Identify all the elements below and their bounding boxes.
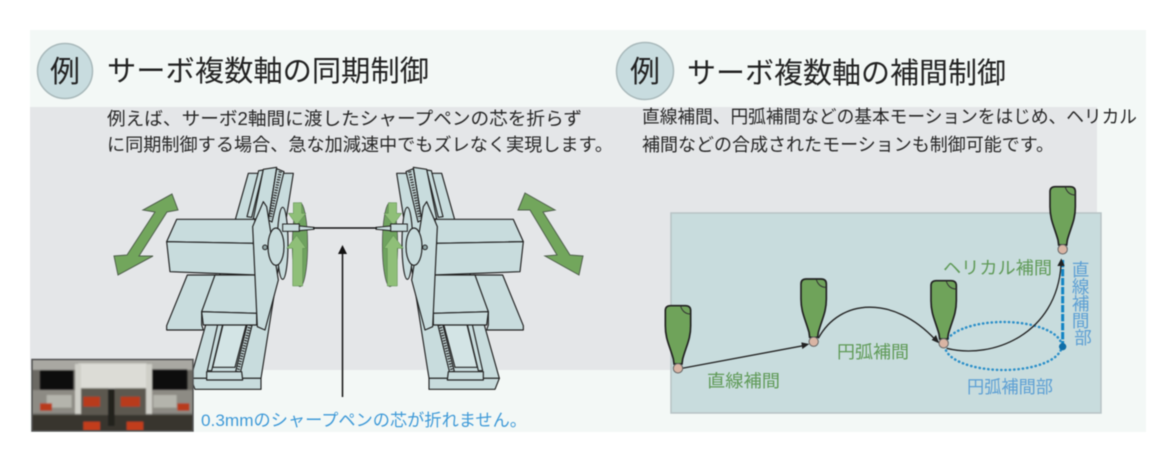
heading: left: サーボ複数軸の同期制御 <box>107 55 429 88</box>
label: linear interpolation section: 間 <box>1072 311 1089 331</box>
pencil lead wire <box>313 227 377 229</box>
heading: right: サーボ複数軸の補間制御 <box>687 57 1006 90</box>
label: arc interpolation section: 円弧補間部 <box>967 377 1053 397</box>
arrow: pointer to lead <box>338 245 347 397</box>
arrow: linear move <box>678 342 809 369</box>
panel: interpolation diagram <box>671 213 1101 413</box>
photo: machine <box>32 359 193 432</box>
gray band <box>30 107 1097 370</box>
label: arc interpolation: 円弧補間 <box>837 342 909 362</box>
label: linear interpolation section: 直 <box>1072 260 1089 280</box>
icon: tool 4 <box>1050 187 1075 254</box>
arrow: left double-headed motion <box>114 194 178 275</box>
label: linear interpolation section: 部 <box>1074 328 1092 348</box>
text block: right description: 補間などの合成されたモーションも制御可能です。 <box>642 135 1054 155</box>
text block: left description: 例えば、サーボ2軸間に渡したシャープペンの芯を折らず <box>107 109 582 129</box>
text block: right description: 直線補間、円弧補間などの基本モーションをはじめ、ヘリカル <box>642 107 1137 127</box>
dotted ellipse: arc interpolation section <box>945 322 1062 370</box>
label: helical interpolation: ヘリカル補間 <box>943 258 1052 278</box>
icon: tool 3 <box>931 281 956 348</box>
chart: tool path <box>665 187 1075 373</box>
label: linear interpolation section: 補 <box>1072 294 1089 314</box>
blue line: linear interpolation section <box>1059 260 1066 350</box>
text block: right description <box>642 107 1137 155</box>
badge: left 例 <box>38 44 92 98</box>
badge: left 例: 例 <box>50 56 80 89</box>
icon: tool 1 <box>665 306 691 373</box>
label: linear interpolation: 直線補間 <box>707 371 780 391</box>
text block: left description: に同期制御する場合、急な加減速中でもズレなく実現します。 <box>107 135 613 155</box>
icon: tool 2 <box>801 279 826 346</box>
badge: right 例 <box>616 42 674 100</box>
badge: right 例: 例 <box>630 56 660 89</box>
label: linear interpolation section: 線 <box>1072 277 1090 297</box>
illustration: right servo machine <box>376 167 523 389</box>
arrow: helical move <box>947 258 1065 351</box>
caption: lead does not break: 0.3mmのシャープペンの芯が折れません。 <box>201 411 527 430</box>
illustration: left servo machine <box>167 167 314 389</box>
arrow: right double-headed motion <box>518 193 583 275</box>
text block: left description <box>107 109 613 155</box>
arrow: arc move <box>818 307 939 343</box>
